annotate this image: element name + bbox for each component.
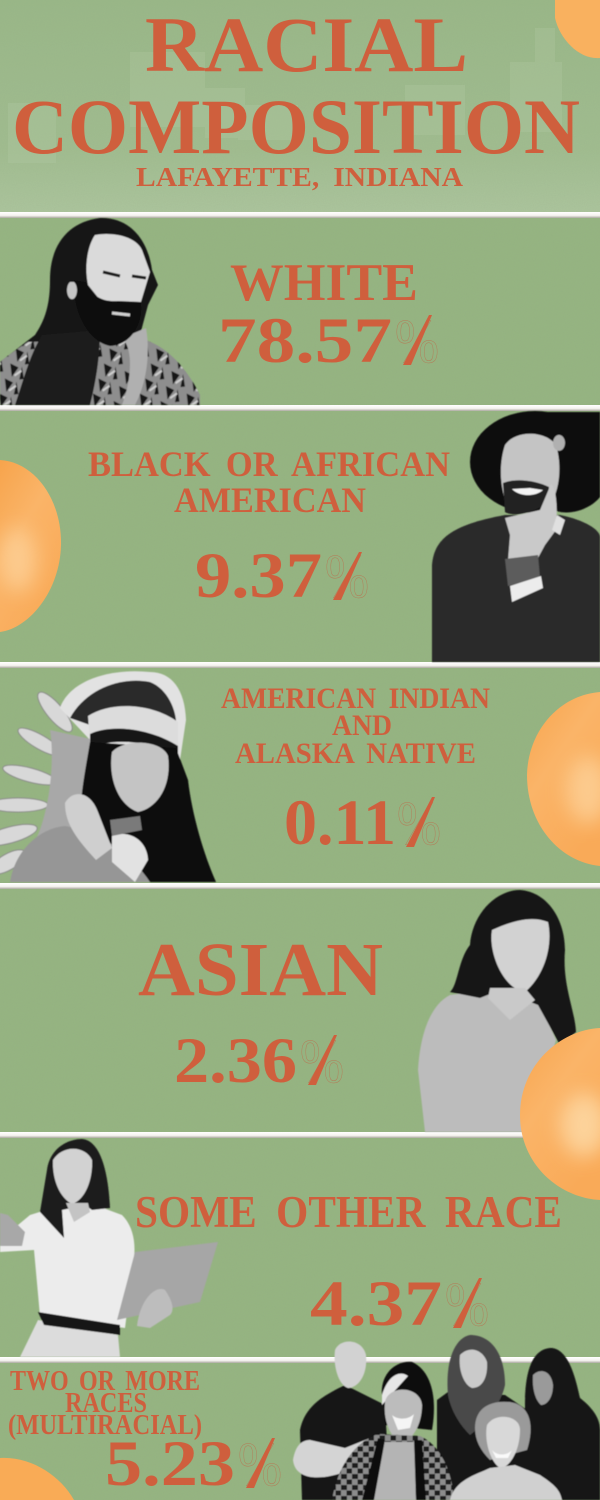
heading: races: RACES: [65, 1388, 147, 1419]
percent sign: %: [445, 1271, 489, 1339]
heading: white: WHITE: [230, 254, 418, 312]
heading: american indian line 1: AMERICAN INDIAN: [221, 682, 490, 715]
icon: orange bottom left: [0, 1458, 74, 1500]
title: Racial: RACIAL: [145, 1, 468, 88]
value: 0.11 percent: 0.11: [284, 787, 396, 859]
heading: asian: ASIAN: [138, 928, 383, 1012]
title: Composition: COMPOSITION: [12, 83, 580, 170]
panel: black or african american: [0, 411, 600, 662]
value: 5.23 percent: 5.23: [105, 1428, 235, 1500]
photo: woman with headdress: [0, 671, 216, 882]
dividers: [0, 212, 600, 1363]
value: 9.37 percent: 9.37: [195, 540, 322, 612]
percent sign: %: [395, 308, 439, 376]
icon: orange right lower: [520, 1028, 600, 1200]
icon: orange left: [0, 460, 61, 632]
heading: black or african american line 1: BLACK OR AFRICAN: [88, 444, 450, 484]
icon: orange top right: [555, 0, 600, 58]
photo: smiling man with afro: [432, 411, 600, 662]
photo: group of five people: [293, 1335, 600, 1500]
photo: man with long hair and beard: [0, 218, 200, 405]
panel: some other race: [0, 1139, 562, 1357]
percent sign: %: [238, 1431, 282, 1499]
photo: woman with laptop: [0, 1139, 218, 1357]
value: 78.57 percent: 78.57: [218, 305, 392, 377]
heading: multiracial: (MULTIRACIAL): [8, 1410, 202, 1441]
panel: asian: [138, 890, 576, 1132]
heading: two or more: TWO OR MORE: [10, 1366, 200, 1397]
value: 4.37 percent: 4.37: [310, 1268, 442, 1340]
heading: alaska native: ALASKA NATIVE: [235, 737, 476, 770]
heading: some other race: SOME OTHER RACE: [135, 1187, 562, 1237]
icon: orange right: [527, 692, 600, 866]
panel: american indian and alaska native: [0, 671, 600, 882]
skyline backdrop: [8, 28, 562, 163]
heading: black or african american line 2: AMERICAN: [174, 480, 366, 520]
percent sign: %: [300, 1028, 344, 1096]
percent sign: %: [325, 543, 369, 611]
percent sign: %: [397, 790, 441, 858]
panel: two or more races: [0, 1335, 600, 1500]
value: 2.36 percent: 2.36: [174, 1025, 297, 1097]
photo: woman looking down: [418, 890, 576, 1132]
heading: and: AND: [332, 709, 392, 742]
panel: white: [0, 218, 439, 405]
subtitle: LAFAYETTE, INDIANA: [136, 162, 464, 192]
